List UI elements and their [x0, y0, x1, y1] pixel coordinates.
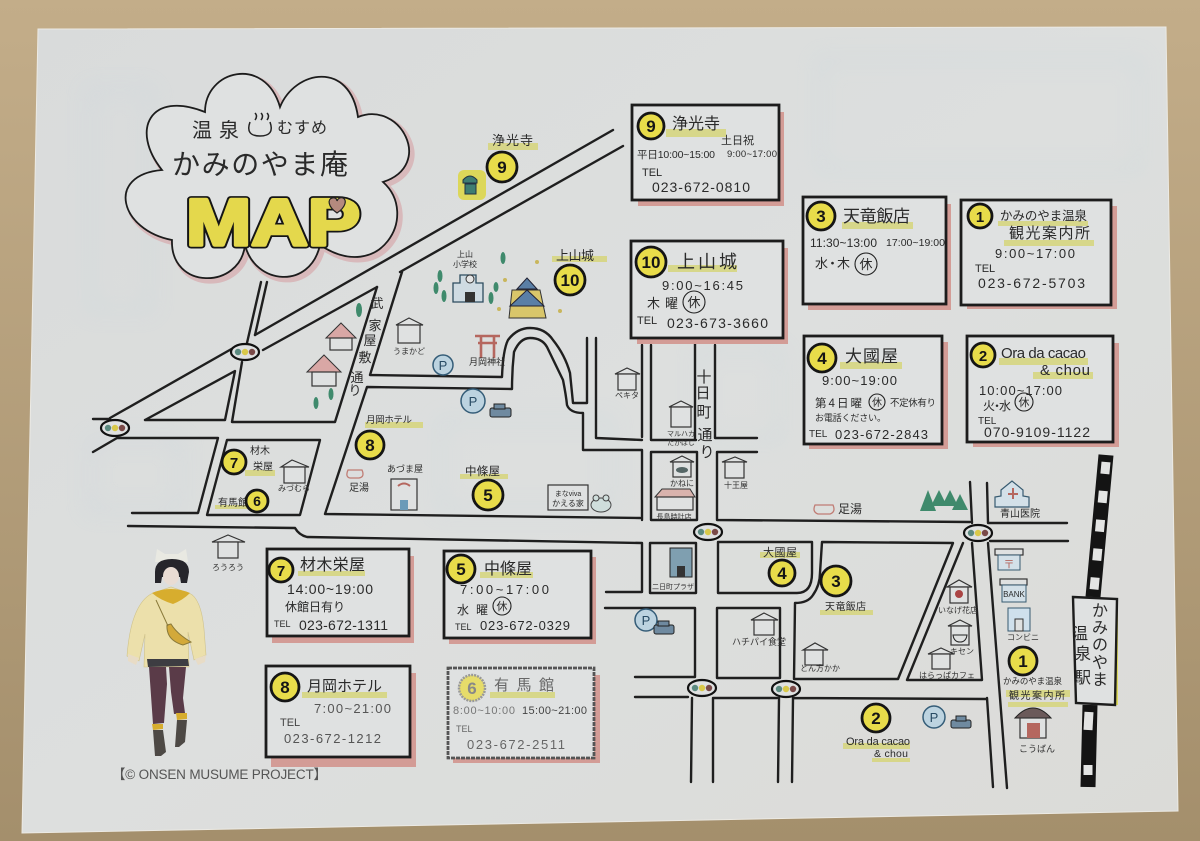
parking icons: P	[642, 613, 650, 628]
map labels: 7 材木栄屋 and 6 有馬館: 有馬館	[218, 496, 248, 509]
card 5: 中條屋: 休	[496, 600, 508, 613]
parking icons: P	[469, 394, 477, 409]
card 10: 上山城: 023-673-3660	[667, 315, 768, 331]
card 9: 浄光寺: 土日祝	[721, 134, 754, 147]
card 4: 大國屋: 第4日曜	[815, 396, 862, 410]
building: 二日町プラザ: 二日町プラザ	[652, 583, 694, 591]
card 7: 材木栄屋: 14:00~19:00	[287, 581, 373, 597]
convenience store: コンビニ	[1007, 633, 1039, 642]
torii: 月岡神社	[469, 336, 505, 367]
map label: 9 浄光寺: 9	[497, 158, 507, 177]
card 7: 材木栄屋: 7	[277, 563, 285, 580]
hospital	[995, 481, 1040, 520]
hat	[155, 549, 188, 562]
shop: とん方かか: とん方かか	[800, 663, 840, 673]
card 4: 大國屋: お電話ください。	[815, 413, 886, 423]
school icon: 上山	[457, 250, 473, 259]
samurai houses	[307, 323, 356, 386]
card 3: 天竜飯店: 水・木	[815, 256, 850, 271]
map label: 8 月岡ホテル: 8	[365, 436, 375, 455]
map label: 1 観光案内所: かみのやま温泉	[1003, 676, 1062, 686]
card 6: 有馬館	[448, 668, 600, 763]
face	[163, 567, 179, 585]
faint show-through on paper	[90, 60, 1140, 510]
map label: 4 大國屋: 4	[777, 564, 787, 583]
sweater	[127, 587, 206, 667]
character: onsen musume	[127, 549, 206, 756]
shop: キセン: キセン	[950, 647, 974, 656]
map labels: 7 材木栄屋 and 6 有馬館: 材木	[250, 444, 270, 457]
map roads	[93, 130, 1068, 788]
card 4: 大國屋: 休	[872, 397, 882, 409]
station sign: み	[1092, 620, 1108, 637]
post office	[995, 549, 1023, 571]
card 7: 材木栄屋: TEL	[274, 619, 291, 629]
card 9: 浄光寺: TEL	[642, 167, 662, 179]
card 5: 中條屋: 023-672-0329	[480, 618, 570, 633]
post office: 〒	[1004, 559, 1014, 571]
shop: 長島時計店: 長島時計店	[656, 512, 692, 521]
hot spring mark	[249, 113, 271, 136]
card 5: 中條屋: 水曜	[457, 603, 488, 617]
card 2: Ora da cacao: Ora da cacao	[1001, 345, 1086, 362]
shop: 長島時計店	[655, 489, 695, 521]
card 5: 中條屋: 7:00~17:00	[460, 582, 549, 597]
shop: 十王屋	[722, 457, 748, 490]
legs	[149, 667, 186, 724]
card 9: 浄光寺: 浄光寺	[672, 115, 720, 133]
street name: 十日町通り: 町	[696, 404, 712, 421]
street name: 十日町通り: 日	[695, 385, 711, 402]
map label: 3 天竜飯店: 天竜飯店	[825, 601, 866, 613]
map label: 5 中條屋	[460, 464, 508, 510]
map label: 2 Ora da cacao: Ora da cacao	[846, 736, 910, 748]
shop: うまかど	[393, 318, 425, 356]
shop: ペキタ: ペキタ	[615, 391, 639, 400]
trees near school	[314, 252, 506, 409]
street name: 武家屋敷通り: 通	[350, 370, 364, 385]
card 10: 上山城	[631, 241, 788, 344]
card 7: 材木栄屋: 023-672-1311	[299, 617, 388, 633]
card 2: Ora da cacao: TEL	[978, 416, 997, 427]
sign: かえる家	[548, 485, 611, 512]
card 6: 有馬館: 15:00~21:00	[522, 705, 587, 717]
map label: 10 上山城: 10	[561, 271, 579, 290]
shop: うまかど: うまかど	[393, 347, 425, 356]
street name: 武家屋敷通り: り	[348, 383, 362, 398]
parking icons: P	[930, 710, 938, 725]
map label: 1 観光案内所	[1003, 647, 1070, 707]
card 5: 中條屋: 5	[456, 560, 466, 579]
station sign: 泉	[1075, 645, 1091, 663]
railway line	[1088, 455, 1106, 787]
card 2: Ora da cacao: 2	[979, 348, 987, 365]
street name: 十日町通り	[695, 369, 715, 461]
map label: 2 Ora da cacao	[843, 704, 910, 762]
map label: 1 観光案内所: 1	[1018, 652, 1028, 671]
station sign: 温	[1072, 625, 1088, 643]
card 10: 上山城: 木曜	[647, 296, 678, 311]
street name: 十日町通り: 十	[696, 369, 712, 386]
shop: はらっぱカフェ	[919, 648, 975, 680]
map labels: 7 材木栄屋 and 6 有馬館	[215, 444, 275, 512]
shop: ペキタ	[615, 368, 640, 400]
parking icons: P	[439, 358, 447, 373]
shop: かねに	[670, 456, 694, 488]
card 8: 月岡ホテル: 023-672-1212	[284, 731, 381, 746]
building: あづま屋: あづま屋	[387, 464, 423, 474]
street name: 武家屋敷通り: 武	[370, 296, 384, 311]
police box: こうばん	[1019, 744, 1055, 754]
station sign: 駅	[1075, 670, 1091, 687]
card 6: 有馬館: 有馬館	[494, 677, 554, 694]
card 4: 大國屋: 023-672-2843	[835, 427, 928, 442]
street name: 武家屋敷通り: 屋	[363, 333, 377, 348]
title cloud: むすめ	[277, 119, 327, 137]
map label: 2 Ora da cacao: & chou	[874, 748, 908, 760]
card 9: 浄光寺: 9	[646, 117, 656, 136]
card 8: 月岡ホテル	[266, 666, 416, 767]
card 6: 有馬館: 023-672-2511	[467, 737, 565, 752]
card 2: Ora da cacao: & chou	[1040, 362, 1090, 379]
card 6: 有馬館: TEL	[456, 724, 473, 734]
card 10: 上山城: 10	[642, 253, 660, 272]
card 3: 天竜飯店	[803, 197, 951, 310]
map label: 10 上山城: 上山城	[556, 248, 594, 263]
convenience store	[1007, 608, 1039, 642]
street name: 武家屋敷通り	[348, 296, 384, 398]
map label: 8 月岡ホテル	[356, 415, 423, 459]
shop: みづむら	[278, 460, 310, 493]
card 3: 天竜飯店: 17:00~19:00	[886, 237, 945, 249]
card 4: 大國屋: TEL	[809, 429, 828, 440]
map label: 10 上山城	[552, 248, 607, 295]
torii: 月岡神社: 月岡神社	[469, 356, 505, 367]
map labels: 7 材木栄屋 and 6 有馬館: 7	[230, 455, 238, 472]
collar	[152, 589, 190, 604]
card 1: 観光案内所: 9:00~17:00	[995, 246, 1075, 261]
shop: キセン	[948, 620, 974, 656]
shop: ろうろう	[212, 535, 245, 572]
hospital: 青山医院	[1000, 507, 1040, 520]
shop: 十王屋: 十王屋	[724, 480, 748, 490]
card 9: 浄光寺	[632, 105, 784, 206]
map label: 9 浄光寺: 浄光寺	[492, 133, 533, 148]
castle icon	[497, 260, 562, 318]
map labels: 7 材木栄屋 and 6 有馬館: 栄屋	[253, 461, 273, 473]
card 9: 浄光寺: 023-672-0810	[652, 179, 750, 195]
card 2: Ora da cacao: 10:00~17:00	[979, 383, 1062, 398]
sign: かえる家: かえる家	[552, 498, 584, 508]
traffic signals	[101, 344, 992, 697]
card 10: 上山城: 9:00~16:45	[662, 278, 743, 293]
map label: 3 天竜飯店: 3	[831, 572, 841, 591]
card 6: 有馬館: 6	[467, 679, 477, 698]
building: あづま屋	[387, 464, 423, 510]
card 5: 中條屋: 中條屋	[484, 560, 532, 578]
hair	[155, 559, 189, 583]
card 8: 月岡ホテル: 7:00~21:00	[314, 701, 391, 716]
school icon	[453, 250, 483, 302]
card 4: 大國屋: 大國屋	[845, 347, 898, 366]
shop: いなげ花店: いなげ花店	[938, 605, 978, 615]
shop: ろうろう: ろうろう	[212, 563, 244, 572]
footbath: 足湯	[838, 502, 862, 516]
pine trees	[920, 490, 968, 511]
shop: ハチパイ食堂	[732, 613, 786, 647]
subtitle name: かみのやま庵	[172, 149, 348, 180]
card 1: 観光案内所: TEL	[975, 263, 995, 275]
shop: たかはし	[667, 401, 695, 447]
card 7: 材木栄屋: 休館日有り	[285, 600, 345, 614]
card 5: 中條屋	[444, 551, 596, 644]
card 9: 浄光寺: 平日10:00~15:00	[637, 149, 715, 161]
street name: 十日町通り: 通	[697, 427, 713, 444]
shop: かねに: かねに	[670, 479, 694, 488]
card 3: 天竜飯店: 11:30~13:00	[810, 236, 877, 250]
card 4: 大國屋: 9:00~19:00	[822, 373, 897, 388]
card 8: 月岡ホテル: TEL	[280, 717, 300, 729]
map label: 4 大國屋	[760, 545, 800, 586]
bag	[156, 600, 191, 645]
map label: 8 月岡ホテル: 月岡ホテル	[366, 415, 412, 426]
map label: 5 中條屋: 中條屋	[465, 464, 500, 478]
card 7: 材木栄屋	[267, 549, 414, 643]
school icon: 小学校	[453, 259, 477, 269]
station sign: ま	[1092, 672, 1108, 689]
card 3: 天竜飯店: 休	[859, 257, 873, 272]
card 5: 中條屋: TEL	[455, 622, 472, 632]
station sign: か	[1092, 603, 1108, 620]
title cloud	[126, 74, 412, 281]
sign: かえる家: まなviva	[555, 490, 581, 498]
card 6: 有馬館: 8:00~10:00	[453, 705, 515, 717]
map label: 1 観光案内所: 観光案内所	[1009, 689, 1065, 702]
station sign: の	[1092, 637, 1108, 654]
street name: 武家屋敷通り: 家	[368, 318, 382, 333]
bank	[1000, 579, 1027, 602]
footbath: 足湯	[349, 481, 369, 494]
card 1: 観光案内所: 023-672-5703	[978, 275, 1085, 291]
subtitle: 温泉	[192, 119, 239, 142]
car icons	[490, 404, 971, 728]
footbath	[814, 502, 862, 516]
heart	[329, 198, 345, 213]
card 4: 大國屋: 4	[817, 349, 827, 368]
card 9: 浄光寺: 9:00~17:00	[727, 149, 777, 160]
card 10: 上山城: 上山城	[677, 252, 737, 272]
card 2: Ora da cacao	[967, 336, 1119, 447]
shop: たかはし: マルハカ	[667, 430, 695, 438]
copyright: 【© ONSEN MUSUME PROJECT】	[112, 767, 327, 782]
card 3: 天竜飯店: 3	[816, 207, 826, 226]
card 1: 観光案内所	[961, 200, 1117, 309]
parking icons	[433, 355, 945, 728]
shop: いなげ花店	[938, 580, 978, 615]
police box	[1015, 708, 1055, 754]
shorts	[147, 659, 189, 667]
bank: BANK	[1003, 590, 1026, 599]
shop: みづむら: みづむら	[278, 484, 310, 493]
map label: 4 大國屋: 大國屋	[763, 545, 797, 559]
card 2: Ora da cacao: 火・水	[983, 399, 1011, 413]
station sign	[1072, 597, 1118, 705]
hands	[128, 654, 206, 665]
card 3: 天竜飯店: 天竜飯店	[843, 207, 910, 226]
socks and boots	[152, 713, 187, 730]
shop: ハチパイ食堂: ハチパイ食堂	[732, 636, 786, 647]
card 8: 月岡ホテル: 8	[280, 678, 290, 697]
MAP letters fill: MAP	[186, 185, 360, 259]
street name: 武家屋敷通り: 敷	[358, 350, 372, 365]
card 8: 月岡ホテル: 月岡ホテル	[307, 678, 382, 695]
card 4: 大國屋: 不定休有り	[890, 397, 936, 409]
map label: 2 Ora da cacao: 2	[871, 709, 881, 728]
street name: 十日町通り: り	[699, 444, 715, 461]
card 4: 大國屋	[804, 336, 948, 449]
card 1: 観光案内所: 観光案内所	[1009, 225, 1090, 242]
card 2: Ora da cacao: 070-9109-1122	[984, 424, 1090, 440]
card 2: Ora da cacao: 休	[1018, 396, 1030, 409]
shop: とん方かか	[800, 643, 840, 673]
map label: 9 浄光寺	[458, 133, 538, 200]
card 10: 上山城: 休	[687, 295, 701, 310]
card 1: 観光案内所: 1	[976, 209, 984, 226]
map labels: 7 材木栄屋 and 6 有馬館: 6	[253, 493, 261, 509]
map label: 3 天竜飯店	[820, 566, 873, 615]
shop: たかはし: たかはし	[667, 439, 695, 447]
building: 二日町プラザ	[652, 548, 694, 591]
shop: はらっぱカフェ: はらっぱカフェ	[919, 671, 975, 680]
MAP letters outline: MAP	[186, 185, 360, 259]
card 1: 観光案内所: かみのやま温泉	[1000, 208, 1087, 223]
card 10: 上山城: TEL	[637, 315, 657, 327]
card 7: 材木栄屋: 材木栄屋	[300, 556, 365, 574]
station sign: や	[1092, 654, 1108, 672]
map label: 5 中條屋: 5	[483, 486, 493, 505]
footbath	[347, 470, 369, 494]
